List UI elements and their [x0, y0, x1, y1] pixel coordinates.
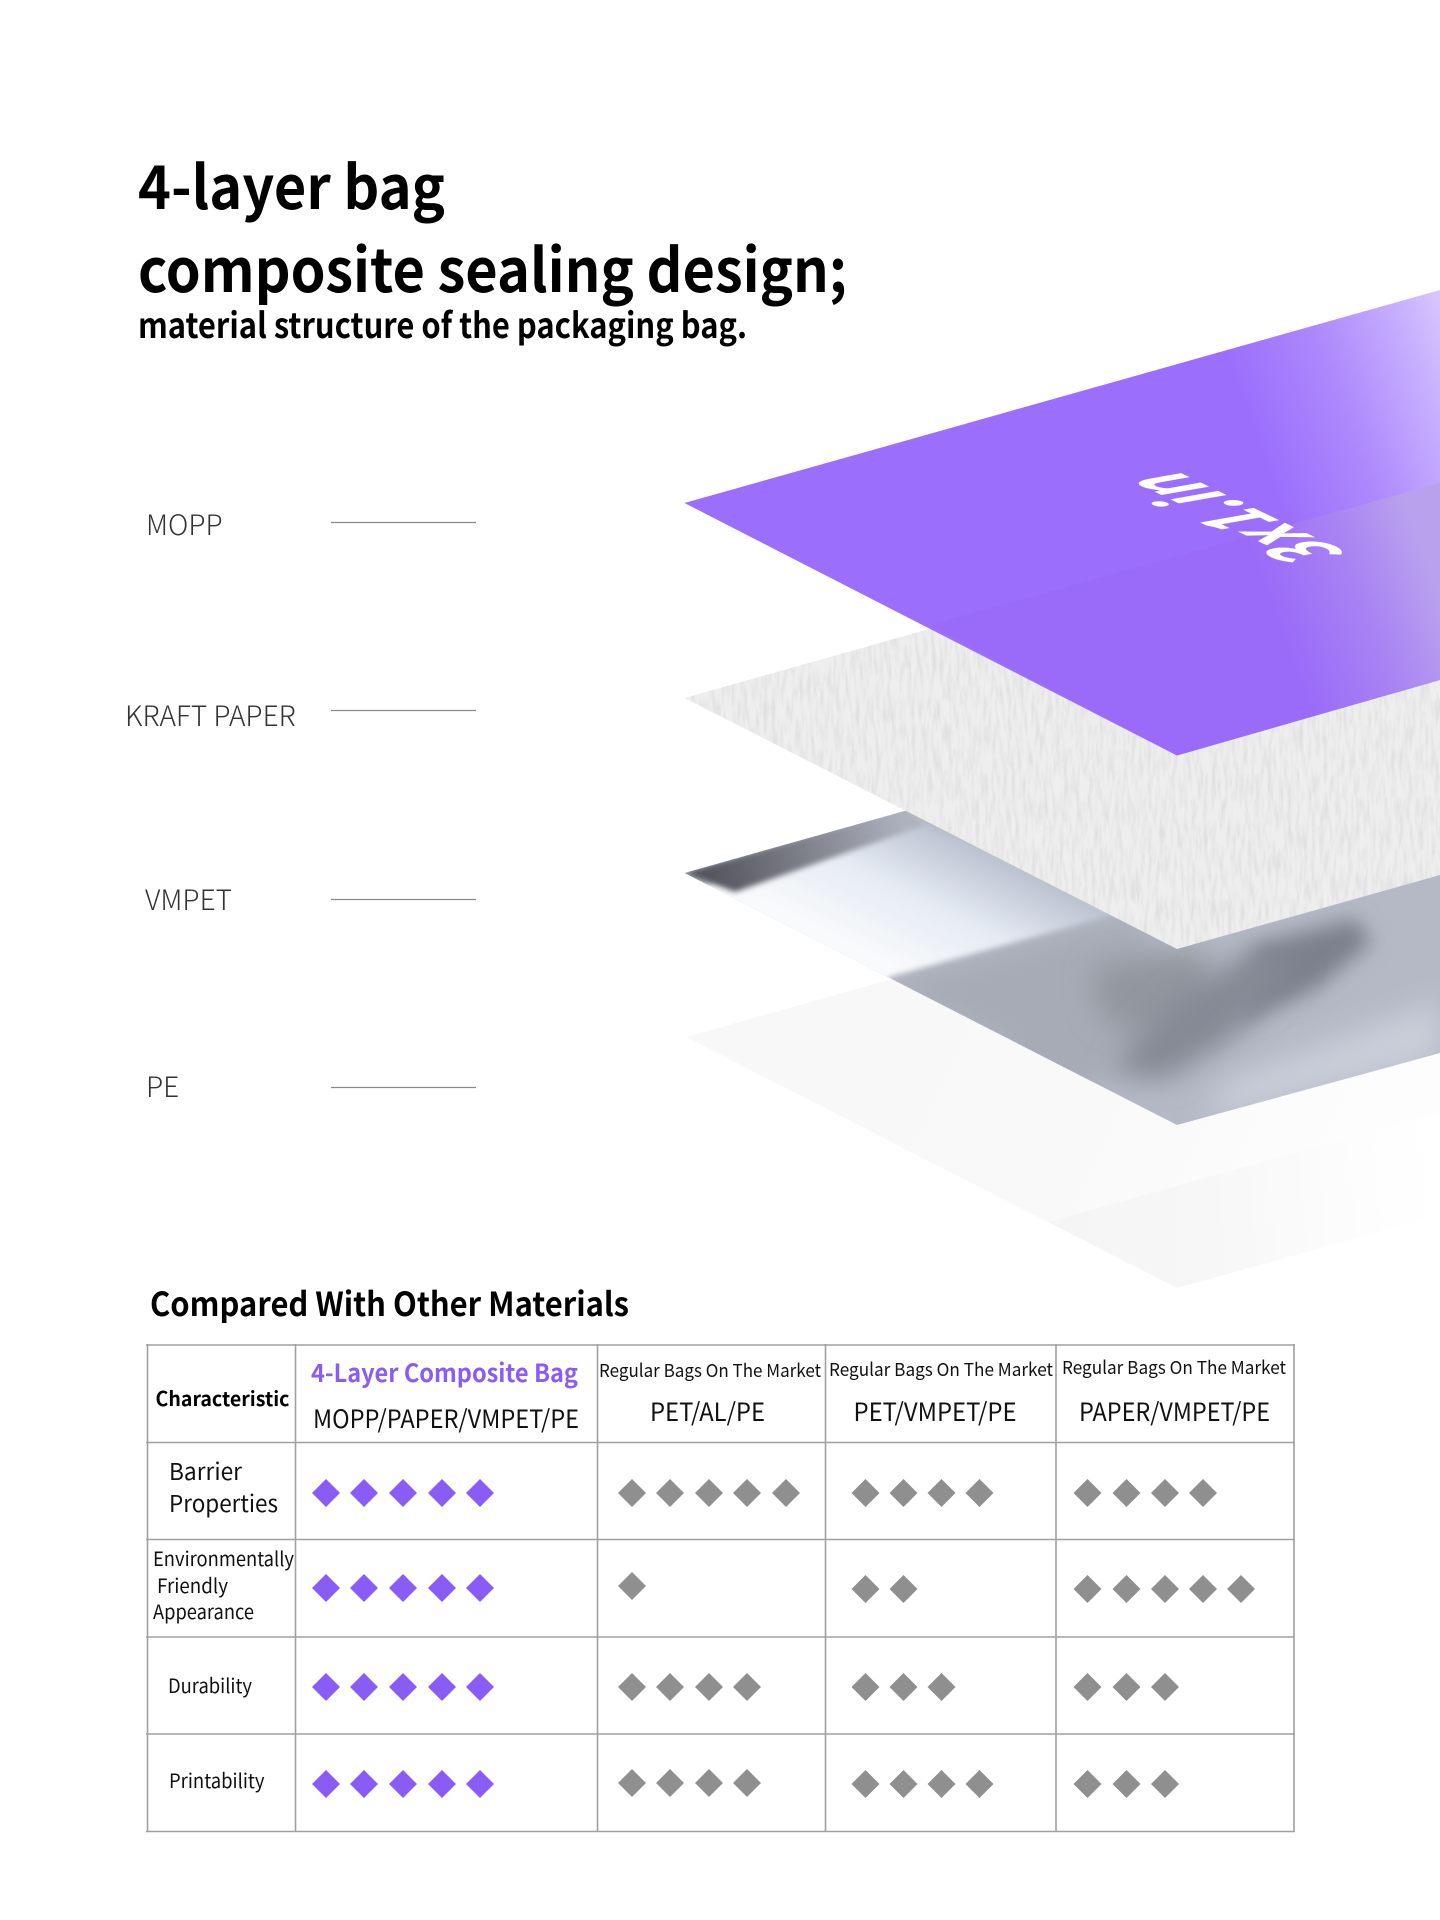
comparison table [146, 1344, 1295, 1832]
row: Durability: Durability [168, 1670, 253, 1699]
row: Environmentally Friendly Appearance [153, 1543, 1255, 1625]
header row: Regular Bags On The Market [829, 1356, 1053, 1382]
row: Printability [169, 1765, 1179, 1798]
header row: PET/VMPET/PE [854, 1393, 1016, 1429]
row: Barrier Properties: Properties [169, 1485, 278, 1519]
logo on MOPP layer: 3x1.in [1078, 467, 1375, 571]
header row: Characteristic [156, 1383, 290, 1412]
header row [156, 1354, 1286, 1436]
label: VMPET: VMPET [145, 879, 232, 919]
header row: PET/AL/PE [650, 1393, 765, 1429]
layer: kraft paper [684, 485, 1440, 949]
comparison heading: Compared With Other Materials [150, 1278, 629, 1326]
row: Barrier Properties [169, 1453, 1217, 1519]
header row: MOPP/PAPER/VMPET/PE [313, 1400, 579, 1436]
header row: Regular Bags On The Market [1062, 1354, 1286, 1380]
layer: VMPET foil [684, 810, 1440, 1125]
subtitle: material structure of the packaging bag. [138, 298, 747, 349]
row: Environmentally Friendly Appearance: Friendly [157, 1570, 229, 1599]
header row: PAPER/VMPET/PE [1079, 1393, 1270, 1429]
table grid [146, 1344, 1295, 1832]
row: Durability [168, 1670, 1179, 1701]
layer: PE film [686, 825, 1440, 1288]
title: 4-layer bag [138, 140, 445, 227]
label: PE: PE [146, 1066, 179, 1106]
layer: MOPP purple [684, 290, 1440, 756]
layer stack illustration [660, 290, 1440, 1288]
label: MOPP: MOPP [146, 504, 223, 544]
header row: Regular Bags On The Market [599, 1357, 821, 1383]
header row: 4-Layer Composite Bag [311, 1354, 578, 1390]
row: Printability: Printability [169, 1765, 265, 1794]
row: Environmentally Friendly Appearance: Environmentally [153, 1543, 295, 1572]
title: composite sealing design; [138, 223, 847, 310]
label: KRAFT PAPER: KRAFT PAPER [125, 695, 296, 735]
title [138, 140, 847, 310]
row: Barrier Properties: Barrier [169, 1453, 243, 1487]
row: Environmentally Friendly Appearance: Appearance [153, 1596, 254, 1625]
